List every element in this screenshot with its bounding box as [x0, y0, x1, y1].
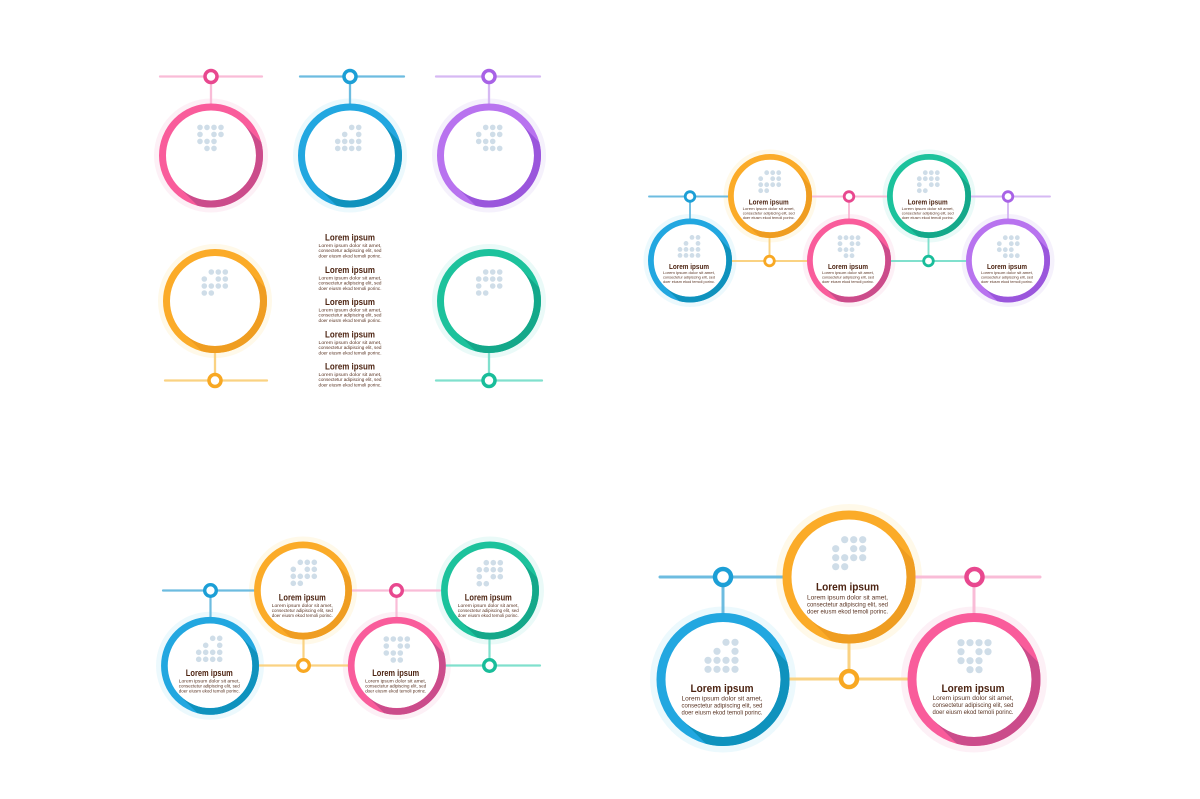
text block: Lorem ipsum dolor sit amet,: [663, 270, 715, 275]
text block: Lorem ipsum: [372, 668, 419, 678]
circle: blue: [651, 221, 732, 302]
circle: orange: [166, 252, 267, 353]
icon: dots: [832, 536, 866, 570]
text block: [981, 263, 1033, 284]
text block: Lorem ipsum dolor sit amet,: [902, 206, 954, 211]
halos: [650, 504, 1047, 752]
text column: consectetur adipiscing elit, sed: [318, 377, 382, 382]
node: blue: [685, 192, 695, 201]
circle: purple: [969, 221, 1050, 302]
text column: Lorem ipsum: [325, 329, 375, 339]
text block: [682, 683, 763, 716]
text block: consectetur adipiscing elit, sed: [365, 684, 427, 688]
node: orange: [209, 374, 221, 386]
text column: doer eiusm ekod temoli porinc.: [318, 350, 382, 355]
text block: [179, 668, 240, 694]
text column: Lorem ipsum dolor sit amet,: [318, 372, 382, 377]
text block: Lorem ipsum: [816, 582, 879, 594]
node: orange: [765, 256, 774, 266]
text column: Lorem ipsum: [325, 362, 375, 372]
text block: Lorem ipsum dolor sit amet,: [981, 270, 1033, 275]
text block: consectetur adipiscing elit, sed: [682, 704, 762, 710]
text block: consectetur adipiscing elit, sed: [807, 602, 888, 608]
connector lines: [160, 76, 542, 380]
circle: green: [440, 252, 541, 353]
text block: consectetur adipiscing elit, sed: [743, 210, 795, 216]
text column: consectetur adipiscing elit, sed: [318, 248, 382, 253]
node: green: [924, 256, 933, 266]
text block: Lorem ipsum: [465, 592, 512, 602]
connector lines: [163, 590, 540, 666]
node: orange: [298, 660, 309, 671]
node: pink: [966, 569, 982, 585]
circle: pink: [351, 620, 446, 715]
halos: [644, 150, 1054, 307]
text block: consectetur adipiscing elit, sed: [179, 684, 240, 688]
halos: [154, 98, 546, 358]
text block: doer eiusm ekod temoli porinc.: [743, 215, 795, 220]
text block: Lorem ipsum dolor sit amet,: [807, 596, 888, 602]
text column: Lorem ipsum: [325, 297, 375, 307]
text block: Lorem ipsum dolor sit amet,: [932, 696, 1014, 702]
node: purple: [483, 70, 495, 82]
circle: pink: [162, 107, 263, 207]
text block: [807, 582, 888, 616]
text block: doer eiusm ekod temoli porinc.: [458, 613, 519, 618]
icon: dots: [197, 125, 224, 151]
node: blue: [715, 569, 731, 585]
text column: Lorem ipsum: [325, 265, 375, 275]
text block: Lorem ipsum: [186, 668, 233, 678]
circle: orange: [257, 545, 352, 639]
text column: consectetur adipiscing elit, sed: [318, 313, 382, 318]
text column: Lorem ipsum dolor sit amet,: [318, 308, 382, 313]
circle: blue: [302, 107, 402, 207]
text block: Lorem ipsum: [828, 263, 868, 271]
node: orange: [841, 671, 857, 687]
circle: green: [890, 157, 971, 238]
text block: doer eiusm ekod temoli porinc.: [272, 613, 333, 618]
panel: five separate circles with text column: [154, 70, 546, 388]
node: pink: [205, 70, 217, 82]
text block: Lorem ipsum dolor sit amet,: [179, 678, 240, 684]
text column: Lorem ipsum dolor sit amet,: [318, 243, 382, 248]
text block: [365, 668, 427, 694]
text block: doer eiusm ekod temoli porinc.: [807, 610, 888, 616]
text block: [743, 198, 795, 220]
text block: Lorem ipsum dolor sit amet,: [743, 206, 795, 211]
text block: [663, 263, 715, 284]
text block: Lorem ipsum: [942, 683, 1005, 695]
connector lines: [660, 577, 1040, 679]
text column: doer eiusm ekod temoli porinc.: [318, 383, 382, 388]
icon: dots: [384, 636, 410, 663]
text block: Lorem ipsum: [749, 198, 789, 206]
node: purple: [1003, 192, 1013, 201]
text block: consectetur adipiscing elit, sed: [822, 274, 874, 279]
text column: Lorem ipsum dolor sit amet,: [318, 275, 382, 280]
text column: consectetur adipiscing elit, sed: [318, 345, 382, 350]
icon: dots: [290, 560, 317, 586]
icon: dots: [476, 560, 503, 586]
text block: Lorem ipsum: [908, 198, 948, 206]
node: pink: [391, 585, 402, 596]
text block: doer eiusm ekod temoli porinc.: [682, 710, 763, 716]
text block: consectetur adipiscing elit, sed: [458, 608, 519, 613]
node: green: [484, 660, 495, 671]
text block: consectetur adipiscing elit, sed: [272, 608, 333, 613]
node: green: [483, 374, 495, 386]
text block: Lorem ipsum: [690, 683, 754, 695]
halos: [156, 536, 544, 720]
text column: Lorem ipsum: [325, 232, 375, 242]
icon: dots: [335, 125, 362, 151]
circle: pink: [912, 618, 1040, 746]
text block: Lorem ipsum dolor sit amet,: [272, 603, 333, 608]
text block: doer eiusm ekod temoli porinc.: [822, 279, 874, 284]
text block: [272, 592, 333, 618]
text column: doer eiusm ekod temoli porinc.: [318, 286, 382, 291]
icon: dots: [704, 639, 739, 673]
circle: purple: [440, 107, 541, 207]
icon: dots: [202, 269, 228, 296]
text block: Lorem ipsum dolor sit amet,: [458, 603, 519, 608]
node: pink: [844, 192, 854, 201]
icon: dots: [997, 235, 1020, 258]
node: blue: [205, 585, 216, 596]
icon: dots: [758, 170, 781, 193]
text block: consectetur adipiscing elit, sed: [981, 274, 1033, 279]
icon: dots: [196, 636, 222, 662]
text block: doer eiusm ekod temoli porinc.: [902, 215, 954, 220]
icon: dots: [678, 235, 700, 258]
text block: doer eiusm ekod temoli porinc.: [365, 688, 426, 694]
text block: Lorem ipsum dolor sit amet,: [682, 696, 763, 702]
text column: doer eiusm ekod temoli porinc.: [318, 254, 382, 258]
text block: consectetur adipiscing elit, sed: [932, 703, 1014, 709]
circle: pink: [810, 221, 891, 302]
text block: Lorem ipsum: [987, 263, 1027, 271]
connector lines: [649, 196, 1050, 261]
text block: consectetur adipiscing elit, sed: [902, 210, 954, 216]
panel: three-step timeline: [650, 504, 1047, 752]
text column: [318, 232, 382, 388]
text block: [458, 592, 519, 618]
icon: dots: [838, 235, 860, 258]
text block: consectetur adipiscing elit, sed: [663, 274, 715, 279]
text block: Lorem ipsum: [669, 263, 709, 271]
icon: dots: [957, 639, 992, 673]
text block: Lorem ipsum dolor sit amet,: [822, 270, 874, 275]
text block: Lorem ipsum dolor sit amet,: [365, 678, 426, 684]
text block: [902, 198, 954, 220]
circle: orange: [731, 157, 812, 238]
text block: doer eiusm ekod temoli porinc.: [932, 710, 1014, 716]
icon: dots: [476, 125, 502, 151]
panel: five-step timeline: [644, 150, 1054, 307]
circle: orange: [787, 515, 915, 643]
text column: consectetur adipiscing elit, sed: [318, 280, 382, 285]
text block: [932, 683, 1014, 716]
text block: doer eiusm ekod temoli porinc.: [179, 688, 240, 694]
icon: dots: [917, 170, 940, 193]
text block: doer eiusm ekod temoli porinc.: [663, 279, 715, 284]
circle: blue: [164, 620, 259, 715]
panel: four-step timeline: [156, 536, 544, 720]
text block: [822, 263, 874, 284]
text column: doer eiusm ekod temoli porinc.: [318, 318, 382, 323]
text column: Lorem ipsum dolor sit amet,: [318, 340, 382, 345]
text block: Lorem ipsum: [279, 592, 326, 602]
text block: doer eiusm ekod temoli porinc.: [981, 279, 1033, 284]
circle: green: [444, 545, 539, 639]
node: blue: [344, 70, 356, 82]
icon: dots: [476, 269, 502, 296]
circle: blue: [661, 618, 789, 746]
